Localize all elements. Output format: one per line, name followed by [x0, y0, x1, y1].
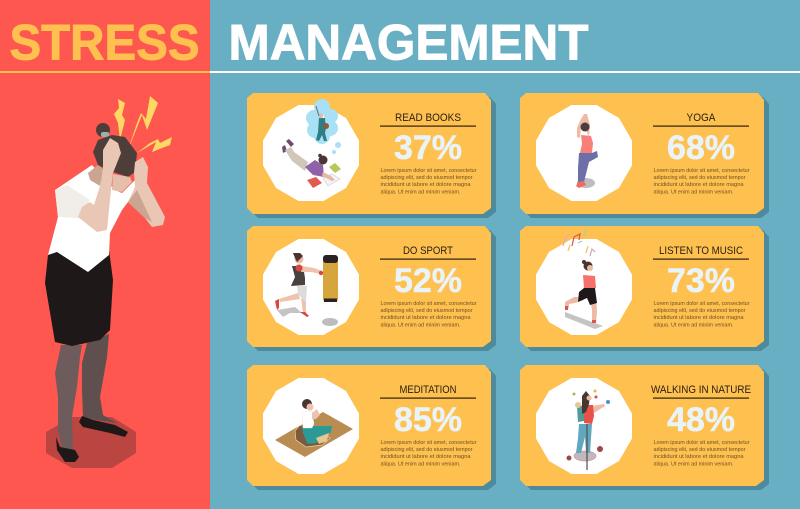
card: read books: [247, 93, 496, 218]
text block: [380, 384, 477, 468]
arm: raised left: [78, 138, 121, 232]
panel: left red background: [0, 0, 210, 509]
platform: [46, 417, 136, 468]
text block: [653, 112, 750, 196]
text block: 52%: [394, 262, 462, 300]
text block: aliqua. Ut enim ad minim veniam.: [380, 462, 461, 468]
neck shade: [88, 165, 104, 186]
text block: incididunt ut labore et dolore magna: [654, 315, 744, 321]
text block: incididunt ut labore et dolore magna: [654, 454, 744, 460]
text block: 37%: [394, 129, 462, 167]
card: meditation: [247, 365, 496, 490]
text block: Lorem ipsum dolor sit amet, consectetur: [380, 301, 477, 307]
text block: [380, 245, 477, 328]
text block: Lorem ipsum dolor sit amet, consectetur: [654, 168, 750, 174]
text block: aliqua. Ut enim ad minim veniam.: [654, 190, 734, 196]
text block: READ BOOKS: [395, 112, 461, 124]
skirt: [45, 248, 113, 346]
text block: MEDITATION: [400, 384, 457, 396]
text block: [380, 112, 477, 196]
text block: adipiscing elit, sed do eiusmod tempor: [380, 447, 473, 453]
text block: adipiscing elit, sed do eiusmod tempor: [654, 308, 746, 314]
text block: aliqua. Ut enim ad minim veniam.: [380, 190, 461, 196]
text block: incididunt ut labore et dolore magna: [380, 454, 471, 460]
panel: right blue background: [210, 0, 800, 509]
text block: 73%: [667, 262, 735, 300]
text block: adipiscing elit, sed do eiusmod tempor: [380, 308, 473, 314]
legs: [82, 334, 117, 423]
card: do sport: [247, 226, 496, 351]
text block: LISTEN TO MUSIC: [659, 245, 743, 257]
text block: aliqua. Ut enim ad minim veniam.: [654, 462, 734, 468]
text block: incididunt ut labore et dolore magna: [380, 182, 471, 188]
text block: [651, 384, 751, 468]
icon: meditating woman on mat: [263, 378, 359, 474]
arm: right: [128, 157, 165, 227]
text block: incididunt ut labore et dolore magna: [380, 315, 471, 321]
card: walking in nature: [520, 365, 769, 490]
title: STRESS: STRESS: [10, 14, 200, 70]
text block: aliqua. Ut enim ad minim veniam.: [380, 322, 461, 328]
text block: adipiscing elit, sed do eiusmod tempor: [380, 175, 473, 181]
card: listen to music: [520, 226, 769, 351]
text block: YOGA: [686, 112, 716, 124]
text block: 85%: [394, 401, 462, 439]
text block: Lorem ipsum dolor sit amet, consectetur: [654, 301, 750, 307]
icon: hiker with butterflies: [536, 378, 632, 474]
shoes: [79, 416, 128, 437]
face: [112, 174, 132, 192]
illustration: stressed woman: [45, 96, 172, 468]
lightning bolts: [114, 96, 172, 153]
text block: Lorem ipsum dolor sit amet, consectetur: [380, 168, 477, 174]
icon: reader with thought bubble: [263, 99, 359, 201]
hair: [93, 135, 137, 177]
blouse: [48, 165, 140, 272]
text block: aliqua. Ut enim ad minim veniam.: [654, 322, 734, 328]
text block: 48%: [667, 401, 735, 439]
icon: boxer with punching bag: [263, 239, 359, 335]
text block: [653, 245, 750, 328]
text block: adipiscing elit, sed do eiusmod tempor: [654, 175, 746, 181]
text block: incididunt ut labore et dolore magna: [654, 182, 744, 188]
text block: WALKING IN NATURE: [651, 384, 751, 396]
bun: [96, 123, 110, 137]
text block: Lorem ipsum dolor sit amet, consectetur: [654, 440, 750, 446]
title: MANAGEMENT: MANAGEMENT: [228, 14, 588, 70]
text block: adipiscing elit, sed do eiusmod tempor: [654, 447, 746, 453]
text block: DO SPORT: [403, 245, 453, 257]
sleeve shade: [55, 185, 90, 218]
icon: runner with music notes: [536, 229, 632, 335]
text block: 68%: [667, 129, 735, 167]
text block: Lorem ipsum dolor sit amet, consectetur: [380, 440, 477, 446]
icon: yoga pose: [536, 105, 632, 201]
card: yoga: [520, 93, 769, 218]
